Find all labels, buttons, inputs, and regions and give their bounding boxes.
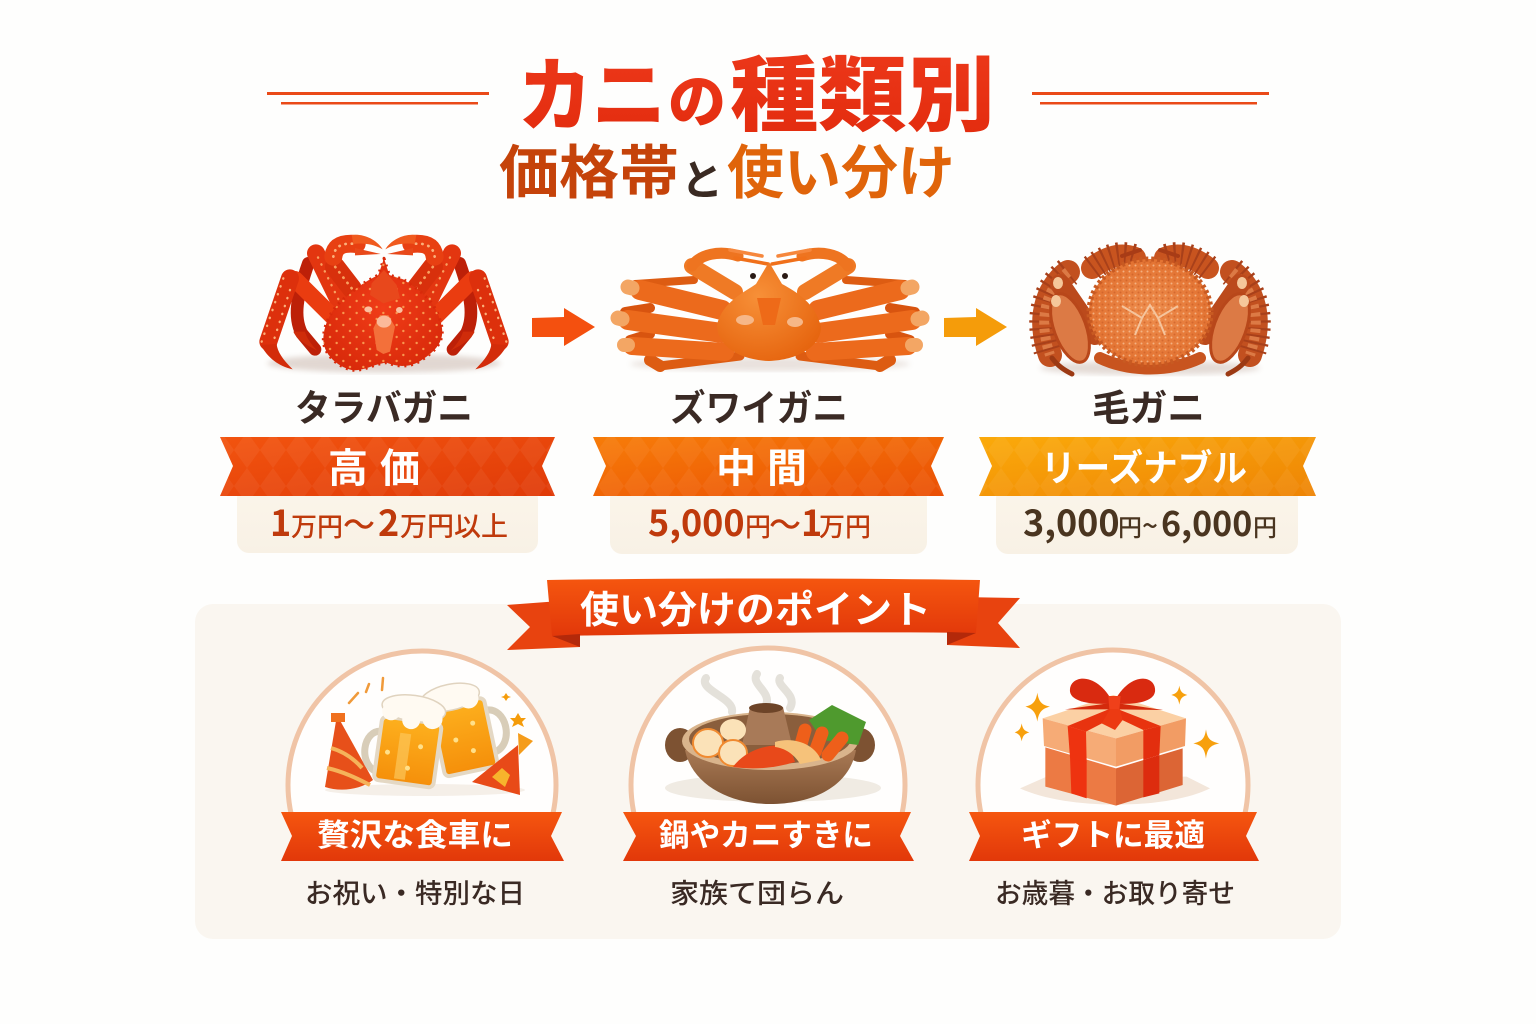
price text: ~	[1142, 505, 1158, 545]
arrow 1	[532, 308, 595, 346]
tier ribbon	[979, 437, 1316, 496]
price text: 1	[801, 495, 822, 547]
section heading: 使い分けのポイント	[580, 579, 931, 634]
panel background	[195, 604, 1341, 939]
panel: usage points	[195, 578, 1341, 939]
arrow 2	[944, 308, 1007, 346]
label ribbon	[281, 812, 564, 861]
tier ribbon	[593, 437, 944, 496]
crab: タラバガニ	[261, 235, 507, 373]
price text: 5,000	[648, 495, 745, 547]
name: タラバガニ: タラバガニ	[295, 378, 473, 432]
carapace	[717, 262, 821, 361]
right legs	[1100, 250, 1257, 374]
price box	[996, 486, 1298, 554]
right side legs	[772, 250, 922, 366]
title line 2	[499, 126, 955, 210]
price text: 円	[745, 507, 771, 544]
title block	[267, 29, 1269, 210]
name: 毛ガニ: 毛ガニ	[1092, 378, 1205, 432]
price text: 万円以上	[400, 505, 508, 544]
price text: 6,000	[1161, 497, 1252, 546]
price card: ズワイガニ	[593, 436, 944, 554]
price card: タラバガニ	[220, 436, 555, 553]
crab: ズワイガニ	[618, 250, 922, 371]
carapace	[1089, 259, 1211, 365]
label text: 贅沢な食車に	[317, 810, 513, 855]
decorative title rules right	[1032, 92, 1269, 104]
price text: 万円	[291, 507, 343, 544]
circle frame	[628, 646, 908, 812]
left mug	[361, 690, 447, 788]
title line 1	[518, 29, 995, 148]
price text: 1	[270, 495, 291, 547]
use case: gift	[969, 650, 1259, 920]
price text: ～	[769, 500, 801, 546]
right mug	[418, 675, 513, 779]
circle frame	[976, 648, 1250, 812]
section ribbon	[507, 578, 1020, 650]
name: ズワイガニ: ズワイガニ	[670, 378, 848, 432]
sub text: 家族て団らん	[670, 872, 844, 911]
sub text: お歳暮・お取り寄せ	[995, 872, 1235, 911]
price text: 円	[1253, 508, 1277, 543]
title line 1: の	[668, 55, 726, 139]
label text: 鍋やカニすきに	[659, 810, 873, 855]
label ribbon	[969, 812, 1259, 861]
price text: 3,000	[1023, 495, 1120, 547]
tier label: 高価	[328, 436, 420, 494]
crab: 毛ガニ	[1040, 250, 1260, 375]
price box	[610, 486, 927, 554]
label ribbon	[623, 812, 914, 861]
price text: 2	[378, 495, 399, 547]
circle frame	[286, 648, 558, 812]
tier ribbon	[220, 437, 555, 496]
title line 1: 種類別	[730, 29, 995, 148]
tier label: 中間	[716, 436, 807, 494]
price card: 毛ガニ	[979, 437, 1316, 554]
left legs	[1043, 250, 1140, 374]
use case: hot pot	[623, 648, 914, 922]
title line 2: と	[681, 147, 723, 208]
left side legs	[618, 250, 768, 366]
title line 2: 価格帯	[499, 126, 679, 210]
sub text: お祝い・特別な日	[305, 872, 525, 911]
crab names	[295, 378, 1205, 432]
title line 1: カニ	[518, 32, 666, 148]
icon: gift box	[1015, 679, 1219, 806]
use case: party	[281, 651, 564, 919]
price box	[237, 486, 538, 553]
tier label: リーズナブル	[1041, 438, 1247, 492]
price text: 万円	[819, 507, 871, 544]
price text: 円	[1118, 508, 1142, 543]
icon: hot pot	[665, 674, 881, 804]
decorative title rules left	[267, 92, 489, 104]
title line 2: 使い分け	[727, 126, 955, 210]
icon: beer mugs and party hats	[325, 675, 533, 796]
price text: ～	[343, 500, 375, 546]
label text: ギフトに最適	[1021, 810, 1205, 855]
